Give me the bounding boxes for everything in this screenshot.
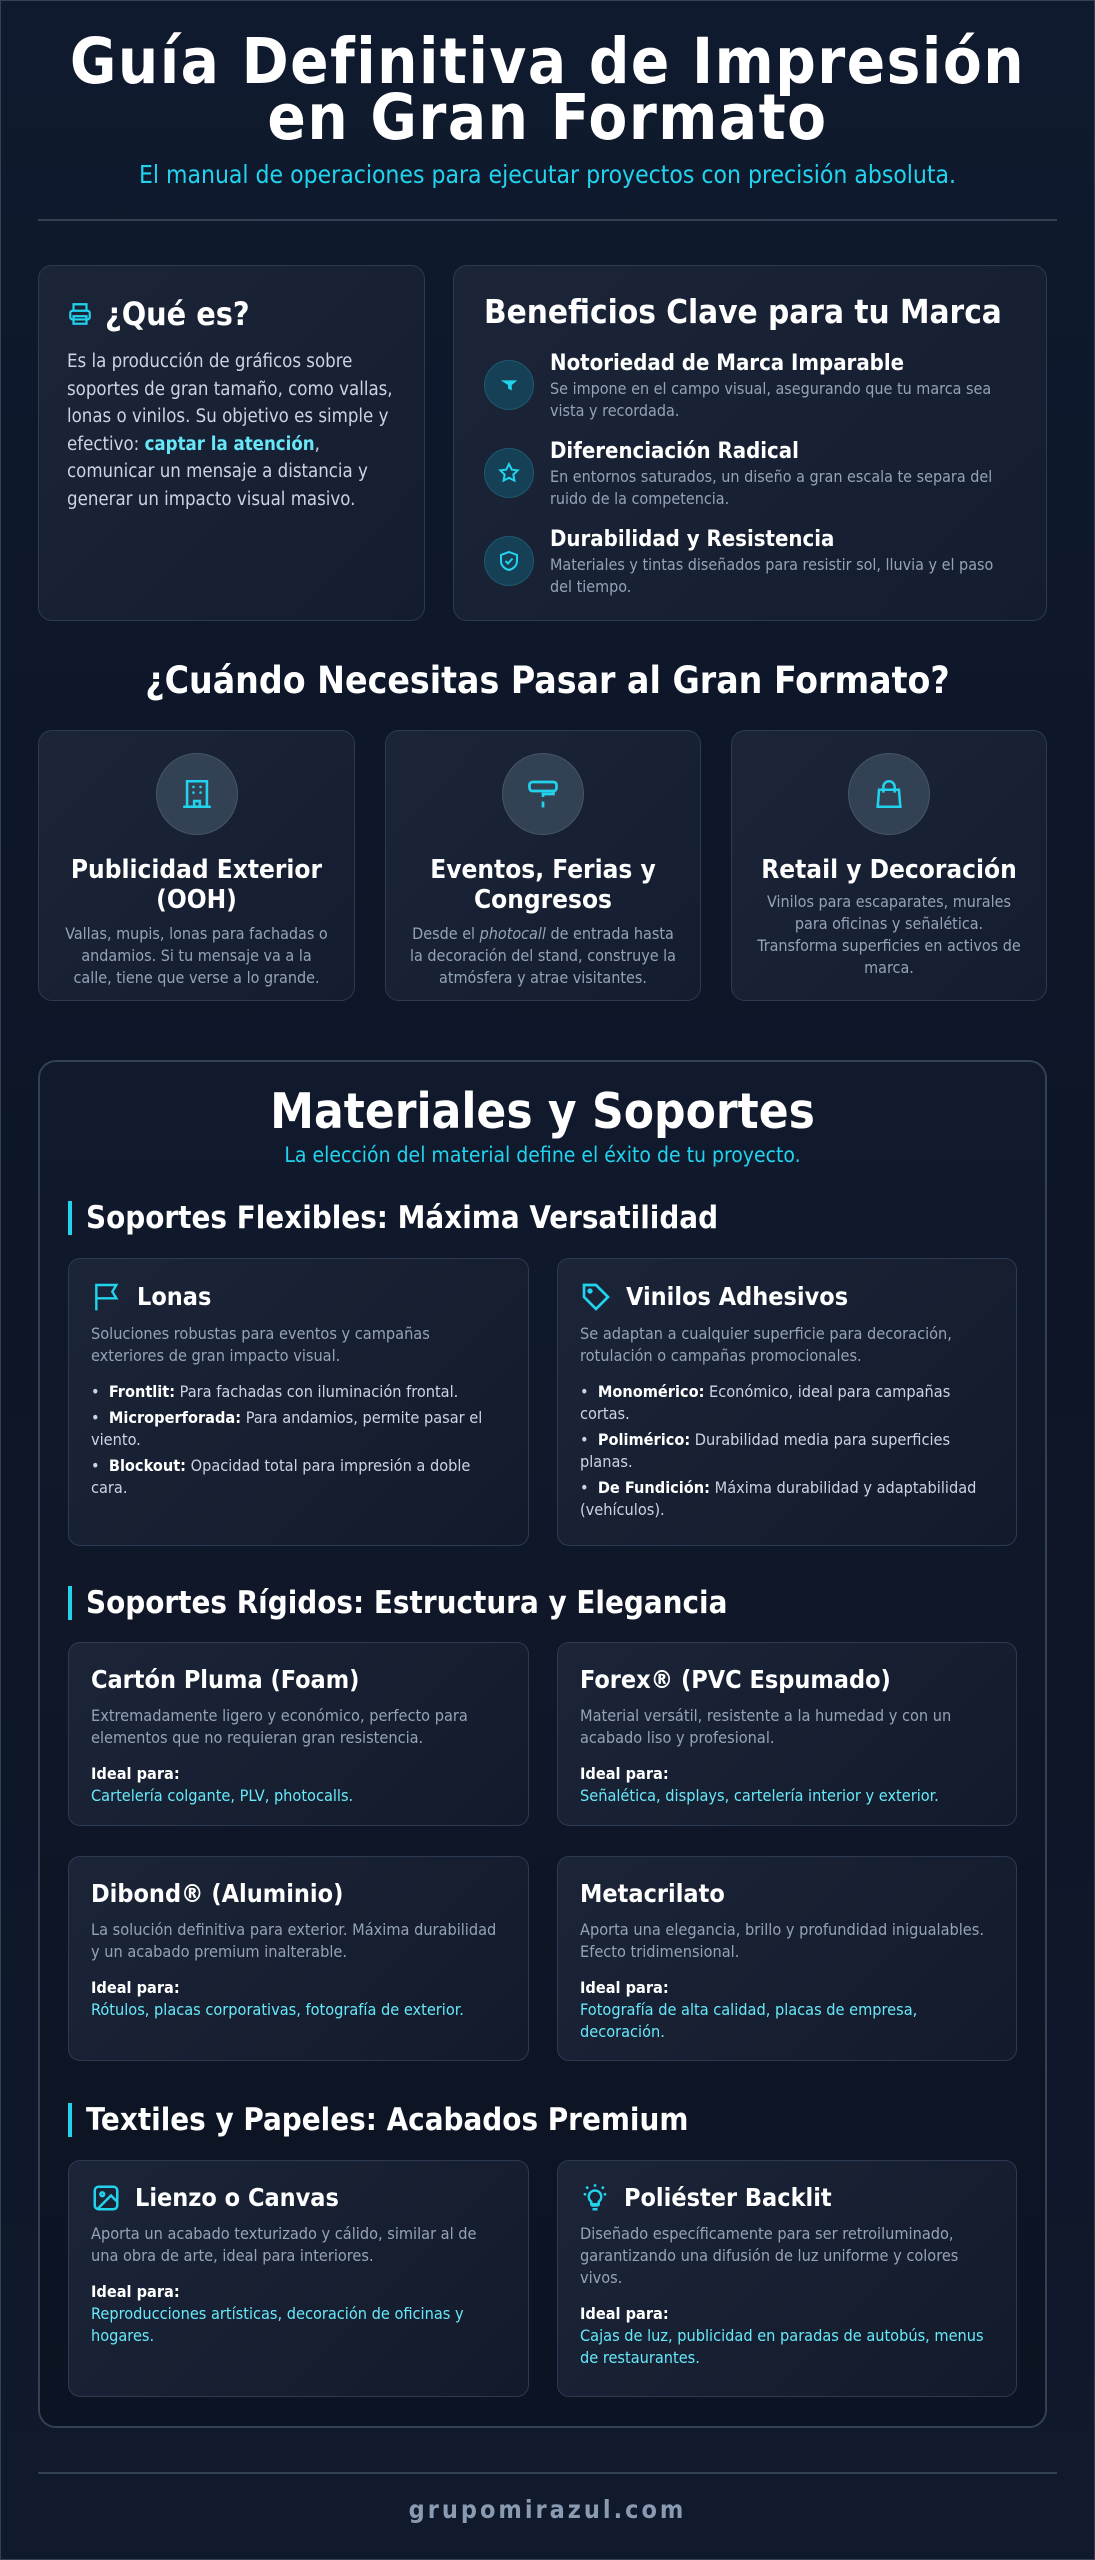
card: metacrilato: Metacrilato (580, 1879, 725, 1908)
benefit 3 (484, 527, 993, 596)
card: dibond: La solución definitiva para exterior. Máxima durabilidad y un acabado premium inalterable. (91, 1920, 496, 1961)
panel: materiales (38, 1060, 1047, 2428)
card: lonas: Lonas (137, 1282, 211, 1311)
title: en Gran Formato (267, 81, 828, 154)
panel: eventos: Desde el photocall de entrada hasta la decoración del stand, construye la atmósfera y atrae visitantes. (410, 924, 676, 987)
icon: megaphone (484, 360, 534, 410)
panel: retail (731, 730, 1047, 1001)
icon: shield (484, 536, 534, 586)
benefit 1: Se impone en el campo visual, asegurando que tu marca sea vista y recordada. (550, 379, 991, 420)
card: cartón pluma: Ideal para: (91, 1764, 180, 1783)
panel: publicidad exterior (38, 730, 355, 1001)
benefit 2 (484, 439, 992, 508)
card: forex: Señalética, displays, cartelería interior y exterior. (580, 1786, 939, 1805)
title (70, 25, 1025, 154)
icon: printer (69, 303, 91, 325)
panel: publicidad exterior: Publicidad Exterior (OOH) (71, 855, 322, 915)
icon: image (94, 2186, 118, 2210)
text: definition: Es la producción de gráficos sobre soportes de gran tamaño, como vallas, lonas o vinilos. Su objetivo es simple y efectivo: captar la atención, comunicar un mensaje a distancia y generar un impacto visual masivo. (67, 351, 393, 510)
card: lonas: • Microperforada: Para andamios, permite pasar el viento. (91, 1408, 482, 1449)
card: cartón pluma (68, 1642, 529, 1826)
card: forex (557, 1642, 1017, 1826)
card: metacrilato: Aporta una elegancia, brillo y profundidad inigualables. Efecto tridimensional. (580, 1920, 984, 1961)
card: backlit: Poliéster Backlit (624, 2183, 832, 2212)
card: backlit: Cajas de luz, publicidad en paradas de autobús, menus de restaurantes. (580, 2326, 984, 2367)
footer: grupomirazul.com (409, 2495, 686, 2524)
subtitle: materiales: La elección del material define el éxito de tu proyecto. (284, 1143, 801, 1167)
panel: publicidad exterior: Vallas, mupis, lonas para fachadas o andamios. Si tu mensaje va a la calle, tiene que verse a lo grande. (65, 924, 328, 987)
panel: beneficios (453, 265, 1047, 621)
card: backlit: Ideal para: (580, 2304, 669, 2323)
card: dibond (68, 1856, 529, 2061)
card: lonas (68, 1258, 529, 1546)
card: vinilos: Se adaptan a cualquier superficie para decoración, rotulación o campañas promocionales. (580, 1324, 952, 1365)
card: forex: Material versátil, resistente a la humedad y con un acabado liso y profesional. (580, 1706, 951, 1747)
card: forex: Forex® (PVC Espumado) (580, 1665, 891, 1694)
card: lienzo (68, 2160, 529, 2397)
card: cartón pluma: Extremadamente ligero y económico, perfecto para elementos que no requieran gran resistencia. (91, 1706, 468, 1747)
panel: eventos: Eventos, Ferias y Congresos (430, 855, 656, 915)
icon: roller (502, 753, 584, 835)
benefit 3: Durabilidad y Resistencia (550, 527, 834, 552)
card: lienzo: Ideal para: (91, 2282, 180, 2301)
subtitle: El manual de operaciones para ejecutar proyectos con precisión absoluta. (139, 160, 956, 189)
heading: materiales: Materiales y Soportes (270, 1083, 815, 1140)
icon: flag (95, 1284, 118, 1310)
panel: qué es (38, 265, 425, 621)
panel: retail: Retail y Decoración (761, 855, 1017, 885)
card: vinilos: • De Fundición: Máxima durabilidad y adaptabilidad (vehículos). (580, 1478, 976, 1519)
panel: retail: Vinilos para escaparates, murales para oficinas y señalética. Transforma superficies en activos de marca. (757, 892, 1021, 977)
card: vinilos (557, 1258, 1017, 1546)
card: lienzo: Lienzo o Canvas (135, 2183, 339, 2212)
icon: bulb (584, 2184, 606, 2210)
card: lonas: Soluciones robustas para eventos y campañas exteriores de gran impacto visual. (91, 1324, 430, 1365)
card: forex: Ideal para: (580, 1764, 669, 1783)
card: backlit (557, 2160, 1017, 2397)
benefit 2: En entornos saturados, un diseño a gran escala te separa del ruido de la competencia. (550, 467, 992, 508)
card: lonas: • Frontlit: Para fachadas con iluminación frontal. (91, 1382, 458, 1401)
heading: qué es: ¿Qué es? (105, 295, 250, 333)
benefit 1: Notoriedad de Marca Imparable (550, 351, 904, 376)
card: lienzo: Aporta un acabado texturizado y cálido, similar al de una obra de arte, ideal para interiores. (91, 2224, 476, 2265)
card: vinilos: Vinilos Adhesivos (626, 1282, 848, 1311)
card: dibond: Ideal para: (91, 1978, 180, 1997)
subheading: flexibles: Soportes Flexibles: Máxima Versatilidad (86, 1200, 718, 1236)
title: Guía Definitiva de Impresión (70, 25, 1025, 98)
card: metacrilato: Ideal para: (580, 1978, 669, 1997)
icon: tag (582, 1284, 610, 1311)
card: lonas: • Blockout: Opacidad total para impresión a doble cara. (91, 1456, 470, 1497)
icon: star (484, 448, 534, 498)
icon: bag (848, 753, 930, 835)
panel: eventos (385, 730, 701, 1001)
subheading: textiles: Textiles y Papeles: Acabados Premium (86, 2102, 688, 2138)
icon: building (156, 753, 238, 835)
card: vinilos: • Polimérico: Durabilidad media para superficies planas. (580, 1430, 950, 1471)
card: metacrilato: Fotografía de alta calidad, placas de empresa, decoración. (580, 2000, 917, 2041)
subheading: rígidos: Soportes Rígidos: Estructura y Elegancia (86, 1585, 727, 1621)
heading: cuándo: ¿Cuándo Necesitas Pasar al Gran Formato? (145, 659, 950, 702)
card: lienzo: Reproducciones artísticas, decoración de oficinas y hogares. (91, 2304, 464, 2345)
benefit 3: Materiales y tintas diseñados para resistir sol, lluvia y el paso del tiempo. (550, 555, 993, 596)
card: cartón pluma: Cartelería colgante, PLV, photocalls. (91, 1786, 353, 1805)
card: cartón pluma: Cartón Pluma (Foam) (91, 1665, 359, 1694)
card: vinilos: • Monomérico: Económico, ideal para campañas cortas. (580, 1382, 950, 1423)
benefit 1 (484, 351, 991, 420)
heading: beneficios: Beneficios Clave para tu Marca (484, 292, 1002, 331)
benefit 2: Diferenciación Radical (550, 439, 799, 464)
card: dibond: Dibond® (Aluminio) (91, 1879, 343, 1908)
card: dibond: Rótulos, placas corporativas, fotografía de exterior. (91, 2000, 464, 2019)
card: metacrilato (557, 1856, 1017, 2061)
card: backlit: Diseñado específicamente para ser retroiluminado, garantizando una difusión de luz uniforme y colores vivos. (580, 2224, 958, 2287)
